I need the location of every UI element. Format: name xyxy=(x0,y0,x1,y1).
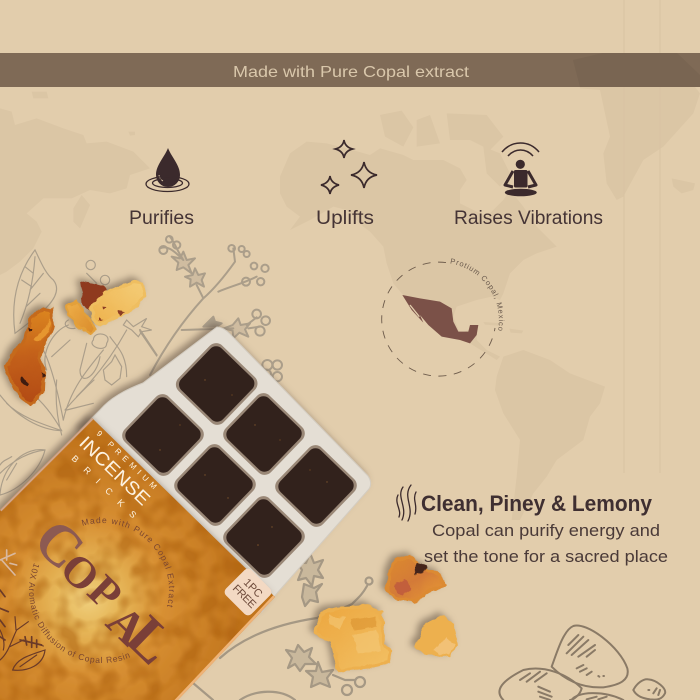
icon: meditating figure with signal xyxy=(502,143,539,196)
box title: COPAL: L xyxy=(114,603,187,677)
dashed circle xyxy=(382,262,495,376)
botanical sketch: branch with buds xyxy=(140,236,282,381)
map callout: Mexico: Protium Copal, Mexico xyxy=(450,258,504,331)
box title: COPAL: O xyxy=(51,543,109,602)
label: Raises Vibrations: Raises Vibrations xyxy=(454,208,603,229)
botanical sketch: leaves xyxy=(14,250,157,420)
top band xyxy=(0,53,700,87)
resin chunk: dark orange xyxy=(6,308,53,403)
box arc text: aromatic diffusion xyxy=(29,563,134,663)
small plant illustration xyxy=(0,550,45,670)
brick sockets xyxy=(118,339,361,582)
box heading: premium incense bricks: INCENSE xyxy=(75,432,155,509)
box title: COPAL xyxy=(22,506,187,677)
box heading: premium incense bricks xyxy=(70,429,159,520)
product: box sleeve: 10X Aromatic Diffusion of Copal Resin xyxy=(29,563,130,664)
label: Purifies: Purifies xyxy=(129,208,194,229)
free tag: 1PC xyxy=(241,577,265,600)
box heading: premium incense bricks: 9 PREMIUM xyxy=(95,429,159,491)
label: Uplifts: Uplifts xyxy=(316,208,374,229)
box title: COPAL: P xyxy=(78,566,132,620)
sketch: stones xyxy=(499,626,665,700)
band text: Made with Pure Copal extract xyxy=(233,64,470,81)
text block: description: set the tone for a sacred place xyxy=(424,548,668,566)
box edges xyxy=(0,418,92,510)
heading: Clean, Piney & Lemony: Clean, Piney & Lemony xyxy=(421,491,653,516)
product: box sleeve xyxy=(0,414,275,700)
resin chunk: amber cluster xyxy=(67,281,145,333)
resin chunk: large amber xyxy=(315,607,390,670)
icon: sparkles xyxy=(321,140,377,194)
vertical fold lines xyxy=(624,0,660,473)
box title: COPAL: A xyxy=(97,595,156,655)
circular label xyxy=(450,264,499,335)
icon: scent waves xyxy=(397,485,416,521)
box title: COPAL: C xyxy=(22,506,97,582)
free tag xyxy=(223,567,273,617)
resin chunk: orange lower xyxy=(388,557,444,601)
Mexico shape xyxy=(402,295,478,343)
text block: description: Copal can purify energy and xyxy=(432,522,660,540)
map callout: Mexico xyxy=(381,258,504,377)
box heading: premium incense bricks: BRICKS xyxy=(70,453,138,520)
brick speckles xyxy=(159,379,328,546)
resin chunk: small amber xyxy=(417,617,458,657)
text block: description xyxy=(424,522,668,566)
box arc text: made with xyxy=(82,523,169,609)
free tag: FREE xyxy=(230,583,258,611)
product: box sleeve: Made with Pure Copal Extract xyxy=(82,516,174,608)
incense bricks xyxy=(122,343,357,578)
product: blister tray xyxy=(80,327,371,612)
icon: water drop xyxy=(146,148,189,192)
world map xyxy=(0,53,700,520)
botanical sketch: lower stem xyxy=(193,553,372,700)
